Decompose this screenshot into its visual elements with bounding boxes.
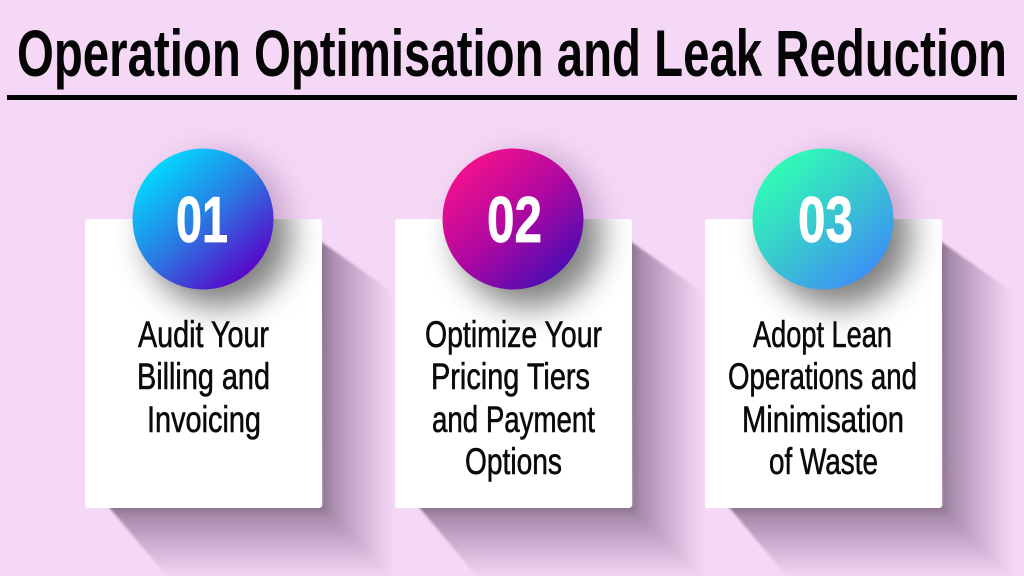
text: step 1: Billing and [137, 356, 270, 397]
text: step 3: of Waste [769, 441, 878, 482]
title underline [7, 95, 1017, 100]
text: step 3: Minimisation [742, 399, 904, 440]
long shadow: step 1 [108, 241, 394, 576]
number badge: step 3: 03 [798, 183, 853, 256]
text: step 3: Adopt Lean [753, 314, 892, 355]
circle shadow: step 1 [147, 154, 291, 307]
long shadow: step 2 [418, 241, 704, 576]
card: step 2 [395, 219, 632, 508]
text: step 2: and Payment [432, 399, 596, 440]
text: step 1: Invoicing [147, 399, 261, 440]
number badge: step 2 [442, 148, 584, 290]
text: step 3 [728, 314, 917, 482]
circle shadow: step 3 [767, 154, 911, 307]
number badge: step 1 [132, 148, 274, 290]
card: step 1 [85, 219, 322, 508]
number badge: step 2: 02 [487, 183, 542, 256]
number badge: step 1: 01 [176, 183, 228, 256]
text: step 2: Optimize Your [425, 314, 602, 355]
number badge: step 3 [752, 148, 894, 290]
card: step 3 [705, 219, 942, 508]
text: step 2 [425, 314, 602, 482]
panel: step 3 [705, 148, 1014, 576]
text: step 1 [137, 314, 270, 440]
panel: step 2 [395, 148, 704, 576]
text: step 1: Audit Your [138, 314, 269, 355]
text: step 2: Options [465, 441, 562, 482]
long shadow: step 3 [728, 241, 1014, 576]
panel: step 1 [85, 148, 394, 576]
text: step 3: Operations and [728, 356, 917, 397]
text: step 2: Pricing Tiers [431, 356, 590, 397]
circle shadow: step 2 [457, 154, 601, 307]
